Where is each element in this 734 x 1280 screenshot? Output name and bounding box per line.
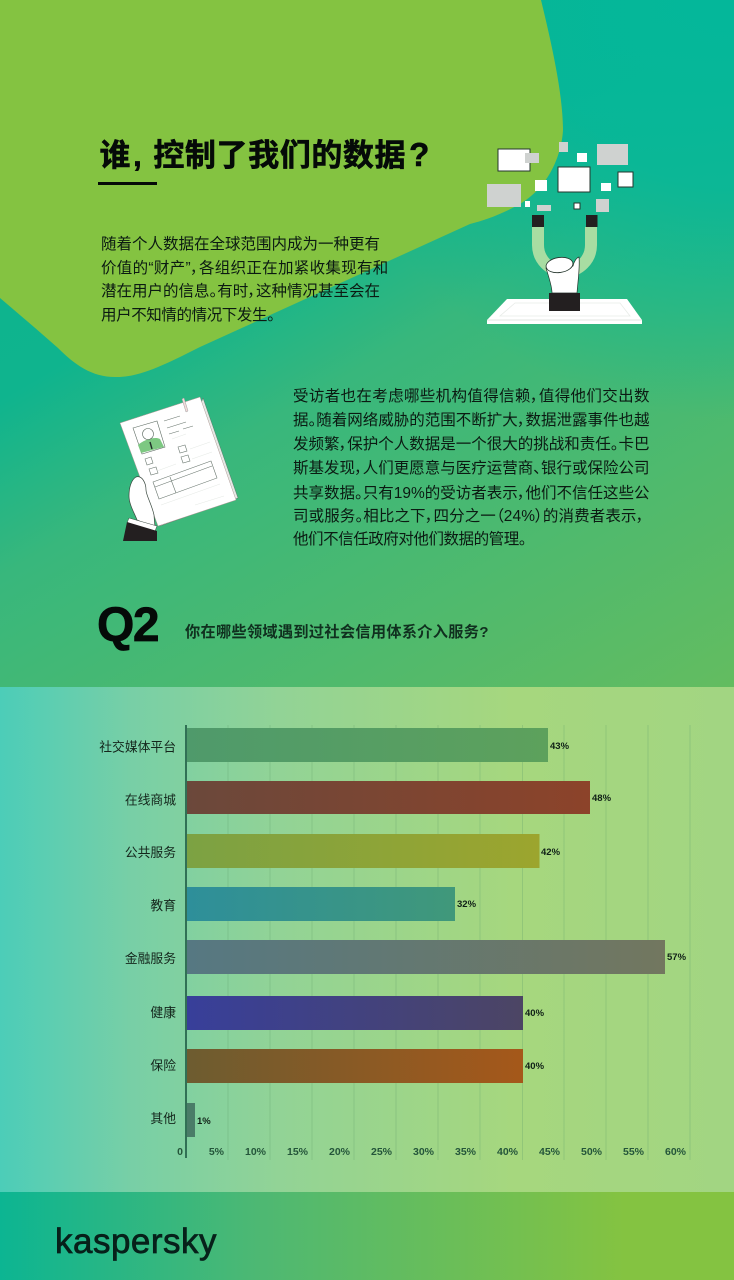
body text block: 斯基发现，人们更愿意与医疗运营商、银行或保险公司 <box>293 460 650 477</box>
axis labels: 60% <box>665 1146 687 1158</box>
bars <box>187 728 665 1137</box>
axis labels: 30% <box>413 1146 435 1158</box>
footer band <box>0 1192 734 1280</box>
intro text block: 随着个人数据在全球范围内成为一种更有 <box>101 236 380 253</box>
value labels: 40% <box>525 1061 545 1072</box>
value labels <box>197 741 687 1127</box>
axis labels: 45% <box>539 1146 561 1158</box>
body text block: 受访者也在考虑哪些机构值得信赖，值得他们交出数 <box>293 388 650 405</box>
background gradient <box>0 0 734 687</box>
category labels: 社交媒体平台 <box>99 740 176 754</box>
background blob: green shape <box>0 0 563 377</box>
intro text block: 价值的“财产”，各组织正在加紧收集现有和 <box>101 260 389 277</box>
value labels: 57% <box>667 952 687 963</box>
value labels: 48% <box>592 793 612 804</box>
category labels: 金融服务 <box>125 951 176 966</box>
title underline <box>98 182 157 184</box>
value labels: 32% <box>457 899 477 910</box>
question number: Q2 <box>97 599 158 652</box>
icon: magnet attracting data <box>487 142 642 324</box>
value labels: 42% <box>541 847 561 858</box>
axis labels: 5% <box>209 1146 225 1158</box>
panel: chart background <box>0 687 734 1192</box>
body text block: 司或服务。相比之下，四分之一（24%）的消费者表示， <box>293 508 644 525</box>
axis labels <box>177 1146 687 1158</box>
category labels: 在线商城 <box>125 792 176 808</box>
intro text block <box>101 236 389 324</box>
intro text block: 用户不知情的情况下发生。 <box>101 307 274 324</box>
body text block: 发频繁，保护个人数据是一个很大的挑战和责任。卡巴 <box>293 436 650 453</box>
title: 谁, 控制了我们的数据? <box>100 136 430 173</box>
body text block: 他们不信任政府对他们数据的管理。 <box>293 531 526 548</box>
value labels: 40% <box>525 1008 545 1019</box>
value labels: 1% <box>197 1116 211 1127</box>
axis labels: 15% <box>287 1146 309 1158</box>
bar chart <box>99 725 690 1160</box>
category labels <box>99 740 176 1126</box>
axis labels: 10% <box>245 1146 267 1158</box>
axis labels: 0 <box>177 1146 183 1158</box>
axis labels: 25% <box>371 1146 393 1158</box>
axis labels: 55% <box>623 1146 645 1158</box>
axis labels: 20% <box>329 1146 351 1158</box>
category labels: 保险 <box>150 1058 176 1073</box>
icon: hand holding resume <box>120 396 238 541</box>
body text block <box>293 388 650 548</box>
intro text block: 潜在用户的信息。有时，这种情况甚至会在 <box>101 283 380 300</box>
axis labels: 35% <box>455 1146 477 1158</box>
body text block: 共享数据。只有19%的受访者表示，他们不信任这些公 <box>293 485 650 502</box>
paper clip <box>182 398 188 412</box>
category labels: 公共服务 <box>125 845 176 860</box>
portrait <box>133 421 165 454</box>
category labels: 健康 <box>150 1005 176 1020</box>
axis labels: 50% <box>581 1146 603 1158</box>
value labels: 43% <box>550 741 570 752</box>
logo: kaspersky: kaspersky <box>55 1222 217 1260</box>
body text block: 据。随着网络威胁的范围不断扩大，数据泄露事件也越 <box>293 412 650 429</box>
question text: 你在哪些领域遇到过社会信用体系介入服务? <box>185 624 489 641</box>
category labels: 教育 <box>150 898 176 913</box>
axis labels: 40% <box>497 1146 519 1158</box>
category labels: 其他 <box>150 1111 176 1126</box>
